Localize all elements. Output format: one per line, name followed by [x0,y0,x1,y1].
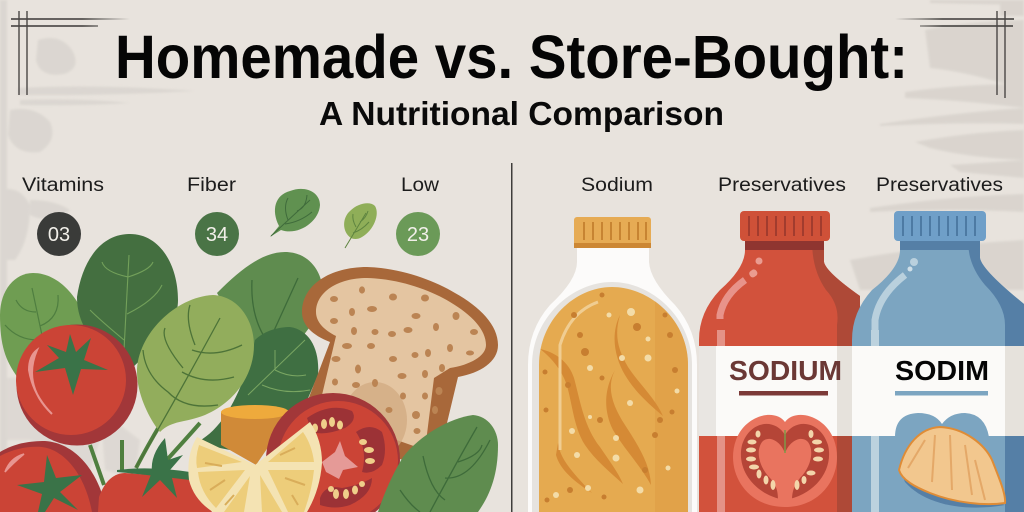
bottle: red sauce [695,211,865,512]
spinach leaf: dark lower [195,327,318,450]
stems [90,423,200,485]
jar cap [574,217,651,248]
spinach leaf: mid green [217,252,330,350]
badge: 03: 03 [48,224,70,246]
label: Preservatives (blue bottle): Preservatives [876,175,1003,196]
tomato slice [266,393,400,512]
orange wedge [221,405,290,465]
tomato: bottom center [98,438,212,512]
badge: 23 [396,212,440,256]
label: Preservatives (red bottle): Preservatives [718,175,846,196]
bottle: sauce jar (orange) [528,217,697,512]
blue bottle cap [894,211,986,241]
subtitle: A Nutritional Comparison [319,95,724,132]
label: Vitamins: Vitamins [22,175,104,196]
blue bottle label: SODIM [895,355,989,386]
bottle: blue [850,211,1024,512]
badge: 23: 23 [407,224,429,246]
spinach leaf: bottom right [378,415,498,512]
icon: small leaf light [344,203,377,248]
spinach leaf: light large [136,295,254,467]
red bottle cap [740,211,830,241]
lemon slice [188,422,322,512]
jar contents texture [540,290,690,512]
bread slice [302,267,498,470]
tomato: bottom left [0,441,103,512]
background texture: left wash [0,0,195,512]
blue bottle label [852,346,1024,508]
spinach leaf: left [0,273,87,378]
illustration: fresh foods [0,234,498,512]
divider [511,163,512,512]
spinach leaf: dark [77,234,178,375]
badge: 03 [37,212,81,256]
corner lines: top right [895,11,1014,98]
red bottle label: SODIUM [729,355,842,386]
background texture: right wash [850,0,1024,290]
icon: small leaf [270,189,320,237]
jar body [528,248,697,512]
badge: 34: 34 [206,224,228,246]
lemon wedge emblem on label [895,413,1005,508]
corner lines: top left [11,11,130,95]
tomato cross-section on label [733,415,837,507]
tomato: top [16,324,138,446]
label: Sodium: Sodium [581,175,653,196]
label: Fiber: Fiber [187,175,237,196]
label: Low: Low [401,175,439,196]
title: Homemade vs. Store-Bought: [115,23,908,91]
badge: 34 [195,212,239,256]
red bottle label [699,346,852,507]
